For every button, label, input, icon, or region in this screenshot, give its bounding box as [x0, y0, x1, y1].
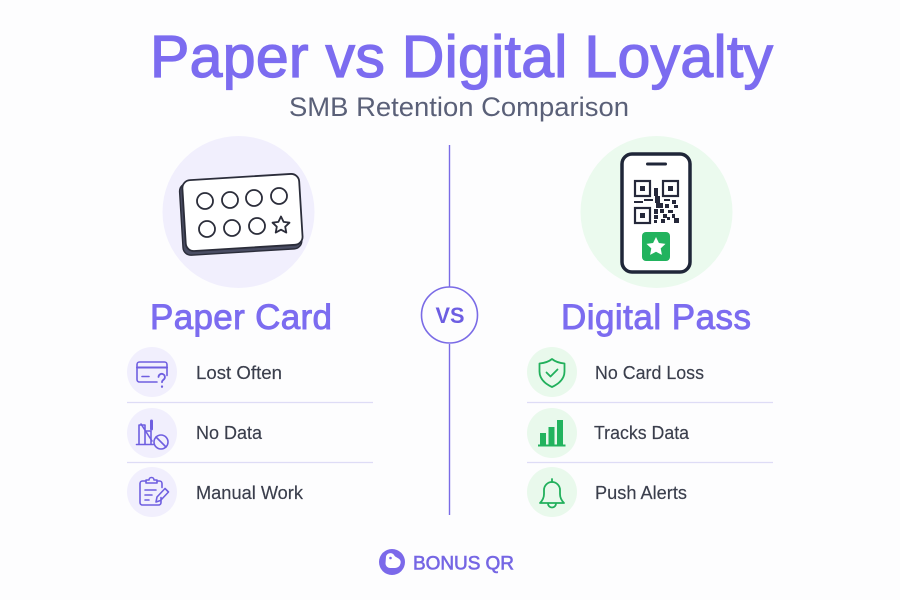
logo: Bonus QR: BONUS QR	[413, 554, 514, 574]
list row: Manual Work	[127, 467, 304, 517]
list row: No Data: No Data	[196, 423, 263, 443]
list row: No Card Loss: No Card Loss	[595, 363, 704, 383]
list row: Push Alerts: Push Alerts	[595, 483, 687, 503]
icon: clipboard with pencil	[140, 478, 168, 505]
icon: phone with QR code	[580, 136, 732, 288]
list row: Tracks Data: Tracks Data	[594, 423, 690, 443]
subtitle: SMB Retention Comparison	[289, 92, 629, 122]
title: Paper vs Digital Loyalty	[150, 24, 774, 90]
panel: digital pass	[527, 136, 773, 517]
list row: Tracks Data	[527, 408, 690, 458]
list row: No Data	[127, 408, 263, 458]
icon: paper stamp card	[162, 136, 314, 288]
panel: paper card	[127, 136, 373, 517]
list row: Lost Often	[127, 347, 282, 397]
heading: Digital Pass: Digital Pass	[561, 298, 751, 337]
list row: Manual Work: Manual Work	[196, 483, 304, 503]
icon: card with question mark	[137, 362, 167, 387]
icon: shield with check	[540, 359, 564, 387]
center divider with VS badge	[422, 145, 478, 515]
center divider with VS badge: VS	[436, 303, 464, 328]
icon: bell	[540, 479, 564, 508]
icon: crossed out bar chart	[136, 421, 168, 449]
list row: No Card Loss	[527, 347, 704, 397]
heading: Paper Card: Paper Card	[150, 298, 332, 337]
list row: Lost Often: Lost Often	[196, 363, 282, 383]
logo: Bonus QR	[379, 549, 514, 575]
icon: rising bar chart	[538, 420, 566, 446]
list row: Push Alerts	[527, 467, 687, 517]
